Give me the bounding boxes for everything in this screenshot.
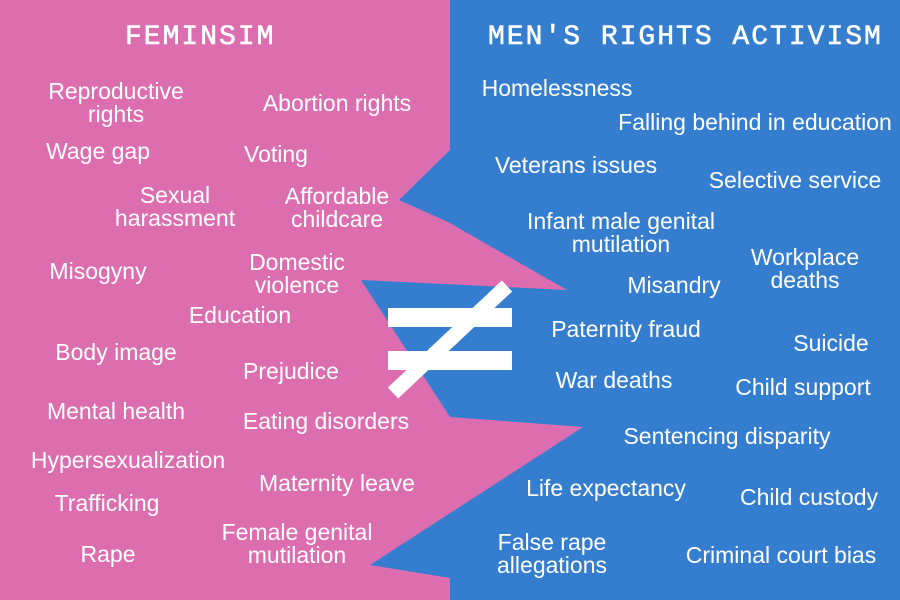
- left issues: Reproductive: [48, 78, 184, 104]
- item: Domestic: [249, 249, 345, 275]
- item: Maternity leave: [259, 470, 415, 496]
- right issues: Homelessness: [482, 75, 632, 101]
- item: violence: [255, 272, 339, 298]
- item: Abortion rights: [263, 90, 411, 116]
- item: [284, 183, 389, 232]
- item: Sexual: [140, 182, 210, 208]
- item: Mental health: [47, 398, 185, 424]
- item: [751, 244, 859, 293]
- title: feminism: FEMINSIM: [125, 22, 275, 53]
- item: Eating disorders: [243, 408, 409, 434]
- item: Wage gap: [46, 138, 150, 164]
- left issues: rights: [88, 101, 144, 127]
- item: War deaths: [556, 367, 672, 393]
- item: Voting: [244, 141, 308, 167]
- item: allegations: [497, 552, 607, 578]
- item: childcare: [291, 206, 383, 232]
- item: mutilation: [572, 231, 670, 257]
- item: Hypersexualization: [31, 447, 225, 473]
- item: mutilation: [248, 542, 346, 568]
- item: Sentencing disparity: [623, 423, 831, 449]
- item: Education: [189, 302, 291, 328]
- item: Body image: [55, 339, 177, 365]
- item: Paternity fraud: [551, 316, 701, 342]
- item: False rape: [498, 529, 606, 555]
- item: deaths: [770, 267, 840, 293]
- left issues: [48, 78, 184, 127]
- item: [249, 249, 345, 298]
- title: men's rights activism: MEN'S RIGHTS ACTIVISM: [488, 22, 883, 53]
- item: harassment: [115, 205, 235, 231]
- item: Affordable: [285, 183, 389, 209]
- item: Misogyny: [49, 258, 147, 284]
- item: Veterans issues: [495, 152, 657, 178]
- item: Child support: [735, 374, 871, 400]
- item: Infant male genital: [527, 208, 715, 234]
- item: Child custody: [740, 484, 878, 510]
- item: [527, 208, 715, 257]
- item: Suicide: [793, 330, 869, 356]
- item: Prejudice: [243, 358, 339, 384]
- item: Selective service: [709, 167, 881, 193]
- item: [497, 529, 607, 578]
- item: Criminal court bias: [686, 542, 876, 568]
- item: Workplace: [751, 244, 859, 270]
- item: [115, 182, 235, 231]
- item: Life expectancy: [526, 475, 686, 501]
- item: Misandry: [627, 272, 721, 298]
- item: Female genital: [222, 519, 372, 545]
- item: [222, 519, 372, 568]
- item: Trafficking: [55, 490, 159, 516]
- item: Rape: [81, 541, 135, 567]
- item: Falling behind in education: [618, 109, 892, 135]
